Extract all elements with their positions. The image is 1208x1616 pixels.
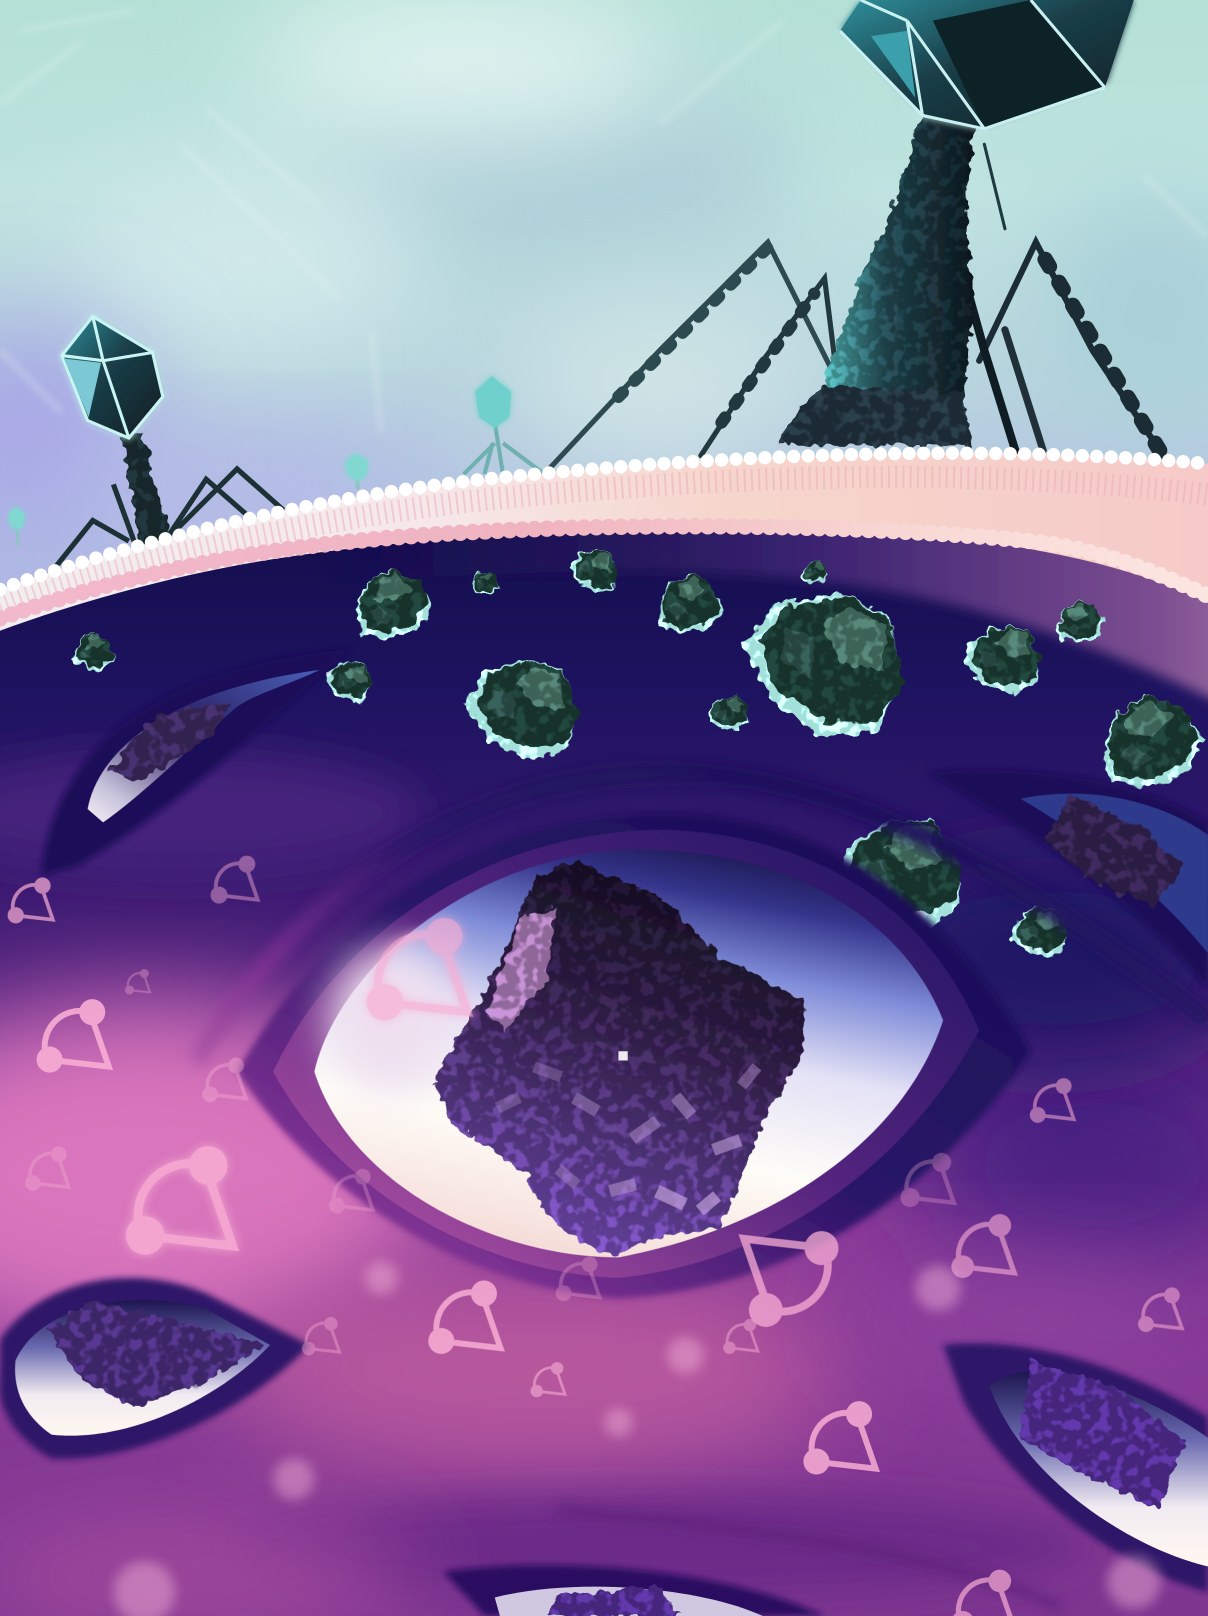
- eyelid folds: [196, 773, 1208, 1062]
- green proteins in cytoplasm: [72, 540, 1208, 959]
- lipid tails under membrane: [309, 523, 1208, 742]
- tiny phage far left: [9, 507, 25, 546]
- phage baseplate: [778, 386, 971, 445]
- light on left of eyeball: [330, 948, 454, 1092]
- phage capsid: [840, 0, 1134, 129]
- eye: bottom centre: [443, 1565, 825, 1616]
- eye: upper right: [928, 770, 1208, 989]
- cell membrane: [0, 453, 1208, 631]
- background sky: [0, 0, 1208, 639]
- mid bacteriophage: [464, 376, 544, 474]
- phage tail: [814, 111, 974, 445]
- phage tail: [122, 433, 173, 548]
- eye: lower left: [0, 1278, 309, 1459]
- highlight chunks on protein: [486, 907, 762, 1215]
- left bacteriophage: [43, 316, 283, 582]
- eye: upper left: [41, 649, 350, 876]
- pink glow on the body: [0, 1000, 433, 1350]
- phage capsid: [62, 316, 163, 438]
- large protein in eye: [433, 861, 804, 1257]
- eye: lower right: [943, 1343, 1208, 1592]
- sky brush streaks: [0, 10, 1208, 433]
- main eye: [196, 773, 1208, 1299]
- glowing molecules: [8, 856, 1182, 1616]
- lower body crease: [557, 1510, 1062, 1608]
- cell body: [0, 505, 1208, 1616]
- phage legs: [546, 144, 1167, 472]
- eyeball: [314, 850, 943, 1257]
- tiny phage: [345, 453, 368, 490]
- phage legs: [43, 469, 283, 582]
- large bacteriophage: [546, 0, 1167, 472]
- soft bokeh lights: [113, 1261, 1161, 1616]
